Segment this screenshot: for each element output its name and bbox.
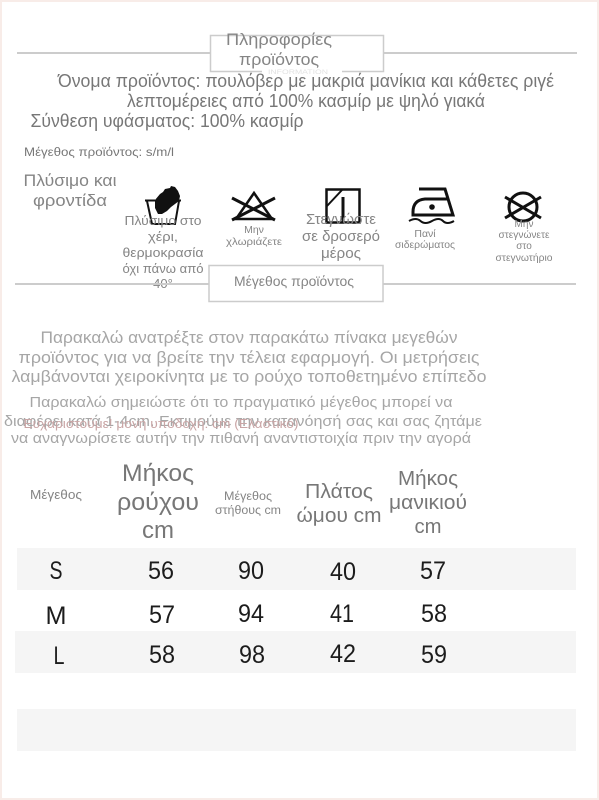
table header row: cm xyxy=(142,517,174,544)
table header row: ώμου cm xyxy=(296,505,382,527)
care label: do not bleach: χλωριάζετε xyxy=(226,236,282,248)
care label: hand wash: θερμοκρασία xyxy=(122,245,204,260)
table row S: S xyxy=(50,557,62,585)
table row M: 41 xyxy=(330,600,354,628)
table row M: 94 xyxy=(238,600,264,628)
care label: do not tumble dry xyxy=(496,219,553,264)
table row M: 58 xyxy=(421,600,447,628)
care label: hand wash: Πλύσιμο στο xyxy=(124,213,202,228)
care label: do not tumble dry: στο xyxy=(516,241,532,252)
icon: do not tumble dry xyxy=(505,193,541,221)
product details text: λεπτομέρειες από 100% κασμίρ με ψηλό γιακά xyxy=(127,91,485,111)
icon: hand wash xyxy=(145,186,181,224)
table header row: Μήκος xyxy=(398,468,458,490)
icon: dry in shade xyxy=(326,190,360,222)
care label: do not bleach: Μην xyxy=(244,224,264,236)
table header row xyxy=(30,460,467,544)
icon: iron with cloth xyxy=(409,189,454,223)
table header row: στήθους cm xyxy=(215,505,281,517)
table header row: μανικιού xyxy=(389,492,467,514)
table header row: Μέγεθος xyxy=(224,491,272,503)
section header: product size xyxy=(15,266,576,302)
size chart instructions: Παρακαλώ ανατρέξτε στον παρακάτω πίνακα μεγεθών xyxy=(40,328,458,347)
size variation note: διαφέρει κατά 1-4cm. Εκτιμούμε την κατανόησή σας και σας ζητάμε xyxy=(4,413,482,430)
table header row: Μήκος xyxy=(122,460,194,487)
size chart instructions: λαμβάνονται χειροκίνητα με το ρούχο τοποθετημένο επίπεδο xyxy=(12,367,486,386)
care label: dry in a cool place xyxy=(302,211,380,262)
table row L: 58 xyxy=(149,641,175,669)
table row S xyxy=(17,548,576,590)
heading: washing and care: φροντίδα xyxy=(33,191,107,210)
product details text xyxy=(24,71,554,159)
care label: do not tumble dry: στεγνώνετε xyxy=(498,229,550,241)
empty table row xyxy=(17,709,576,751)
care label: do not bleach xyxy=(226,224,282,248)
care label: hand wash: όχι πάνω από xyxy=(122,261,204,276)
icon: do not bleach xyxy=(232,193,275,220)
table row S: 56 xyxy=(148,557,174,585)
table row L: 98 xyxy=(239,641,265,669)
table row L: 42 xyxy=(330,640,356,668)
size chart instructions xyxy=(12,328,486,386)
table header row: ρούχου xyxy=(117,489,199,516)
size variation note: Παρακαλώ σημειώστε ότι το πραγματικό μέγεθος μπορεί να xyxy=(30,394,453,411)
care label: dry in a cool place: σε δροσερό xyxy=(302,228,380,245)
care label: iron cloth xyxy=(395,228,455,251)
section header: product information: Πληροφορίες xyxy=(226,30,332,49)
table row L xyxy=(15,631,576,673)
care label: do not tumble dry: στεγνωτήριο xyxy=(496,252,553,264)
product details text: Μέγεθος προϊόντος: s/m/l xyxy=(24,145,174,159)
size variation note xyxy=(4,394,482,447)
table row M: M xyxy=(46,602,66,630)
section header: product information: INFORMATION xyxy=(268,70,328,76)
size chart instructions: προϊόντος για να βρείτε την τέλεια εφαρμογή. Οι μετρήσεις xyxy=(18,348,480,367)
table row S: 57 xyxy=(420,557,446,585)
table header row: Πλάτος xyxy=(305,481,373,503)
product details text: Όνομα προϊόντος: πουλόβερ με μακριά μανίκια και κάθετες ριγέ xyxy=(57,71,554,91)
care label: dry in a cool place: Στεγνώστε xyxy=(306,211,376,228)
section header: product information: προϊόντος xyxy=(239,50,319,69)
table row L: L xyxy=(54,642,65,670)
care label: iron cloth: σιδερώματος xyxy=(395,239,455,251)
care label: do not tumble dry: Μην xyxy=(515,219,533,230)
care label: dry in a cool place: μέρος xyxy=(321,245,361,262)
heading: washing and care: Πλύσιμο και xyxy=(24,171,117,190)
product details text: Σύνθεση υφάσματος: 100% κασμίρ xyxy=(30,111,304,131)
care label: iron cloth: Πανί xyxy=(414,228,436,240)
section header: product information xyxy=(17,30,577,76)
care label: hand wash: 40° xyxy=(153,276,173,291)
care label: hand wash: χέρι, xyxy=(148,229,178,244)
table row M: 57 xyxy=(149,601,175,629)
size variation note: να αναγνωρίσετε αυτήν την πιθανή αναντιστοιχία πριν την αγορά xyxy=(11,430,471,447)
section header: product size: Μέγεθος προϊόντος xyxy=(234,273,354,289)
table row M xyxy=(46,600,447,630)
heading: washing and care xyxy=(24,171,117,210)
table header row: Μέγεθος xyxy=(30,488,82,502)
elasticity note: Ευχαριστούμε! μονή υποδοχή: cm (Ελαστικό) xyxy=(24,417,298,431)
table header row: cm xyxy=(414,516,442,538)
table row S: 90 xyxy=(238,557,264,585)
table row S: 40 xyxy=(330,558,356,586)
table row L: 59 xyxy=(421,641,447,669)
care label: hand wash xyxy=(122,213,204,291)
